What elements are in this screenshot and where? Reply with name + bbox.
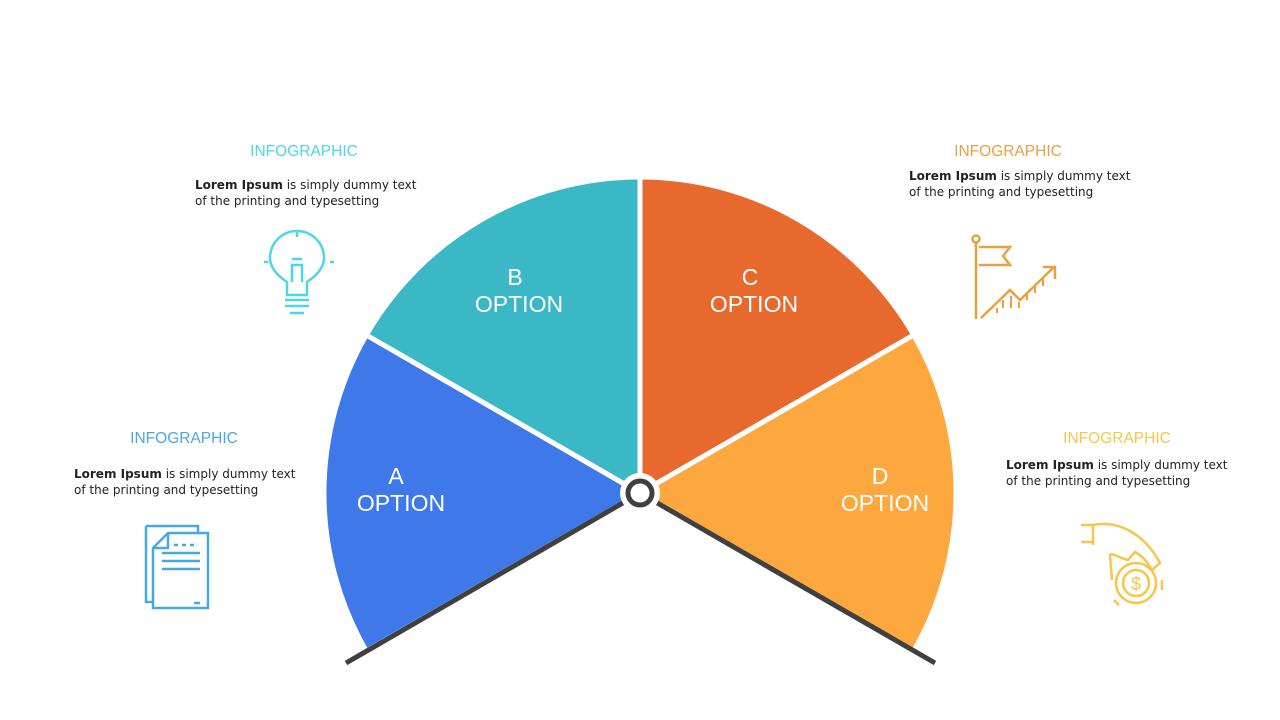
needle lines [346,493,935,663]
heading D: INFOGRAPHIC [1063,430,1171,447]
sector A: A [388,463,404,489]
sector B: OPTION [475,291,563,317]
icon: hand with coin: $ [1131,574,1141,594]
sector D [640,335,956,651]
body D: of the printing and typesetting [1006,474,1190,488]
block B text [195,143,416,208]
body A: of the printing and typesetting [74,483,258,497]
body C [909,169,1130,199]
sector D: OPTION [841,490,929,516]
sector C [640,177,914,493]
icon: documents [146,526,208,608]
body B [195,178,416,208]
heading C: INFOGRAPHIC [954,143,1062,160]
icon: hand with coin [1081,524,1162,605]
icon: light bulb [264,231,334,313]
sector D: D [872,463,888,489]
sector B: B [507,264,523,290]
body C: Lorem Ipsum is simply dummy text [909,169,1130,183]
body B: Lorem Ipsum is simply dummy text [195,178,416,192]
sector B [366,177,640,493]
block A text [74,430,296,497]
sector A: OPTION [357,490,445,516]
body A [74,467,296,497]
sector A [324,335,640,651]
block D text [1006,430,1228,488]
block C text [909,143,1130,199]
body A: Lorem Ipsum is simply dummy text [74,467,295,481]
heading A: INFOGRAPHIC [130,430,238,447]
center pivot [620,473,660,513]
body C: of the printing and typesetting [909,185,1093,199]
icon: flag chart [972,236,1055,319]
heading B: INFOGRAPHIC [250,143,358,160]
body D: Lorem Ipsum is simply dummy text [1006,458,1227,472]
sector C: OPTION [710,291,798,317]
body B: of the printing and typesetting [195,194,379,208]
sector C: C [742,264,758,290]
body D [1006,458,1228,488]
